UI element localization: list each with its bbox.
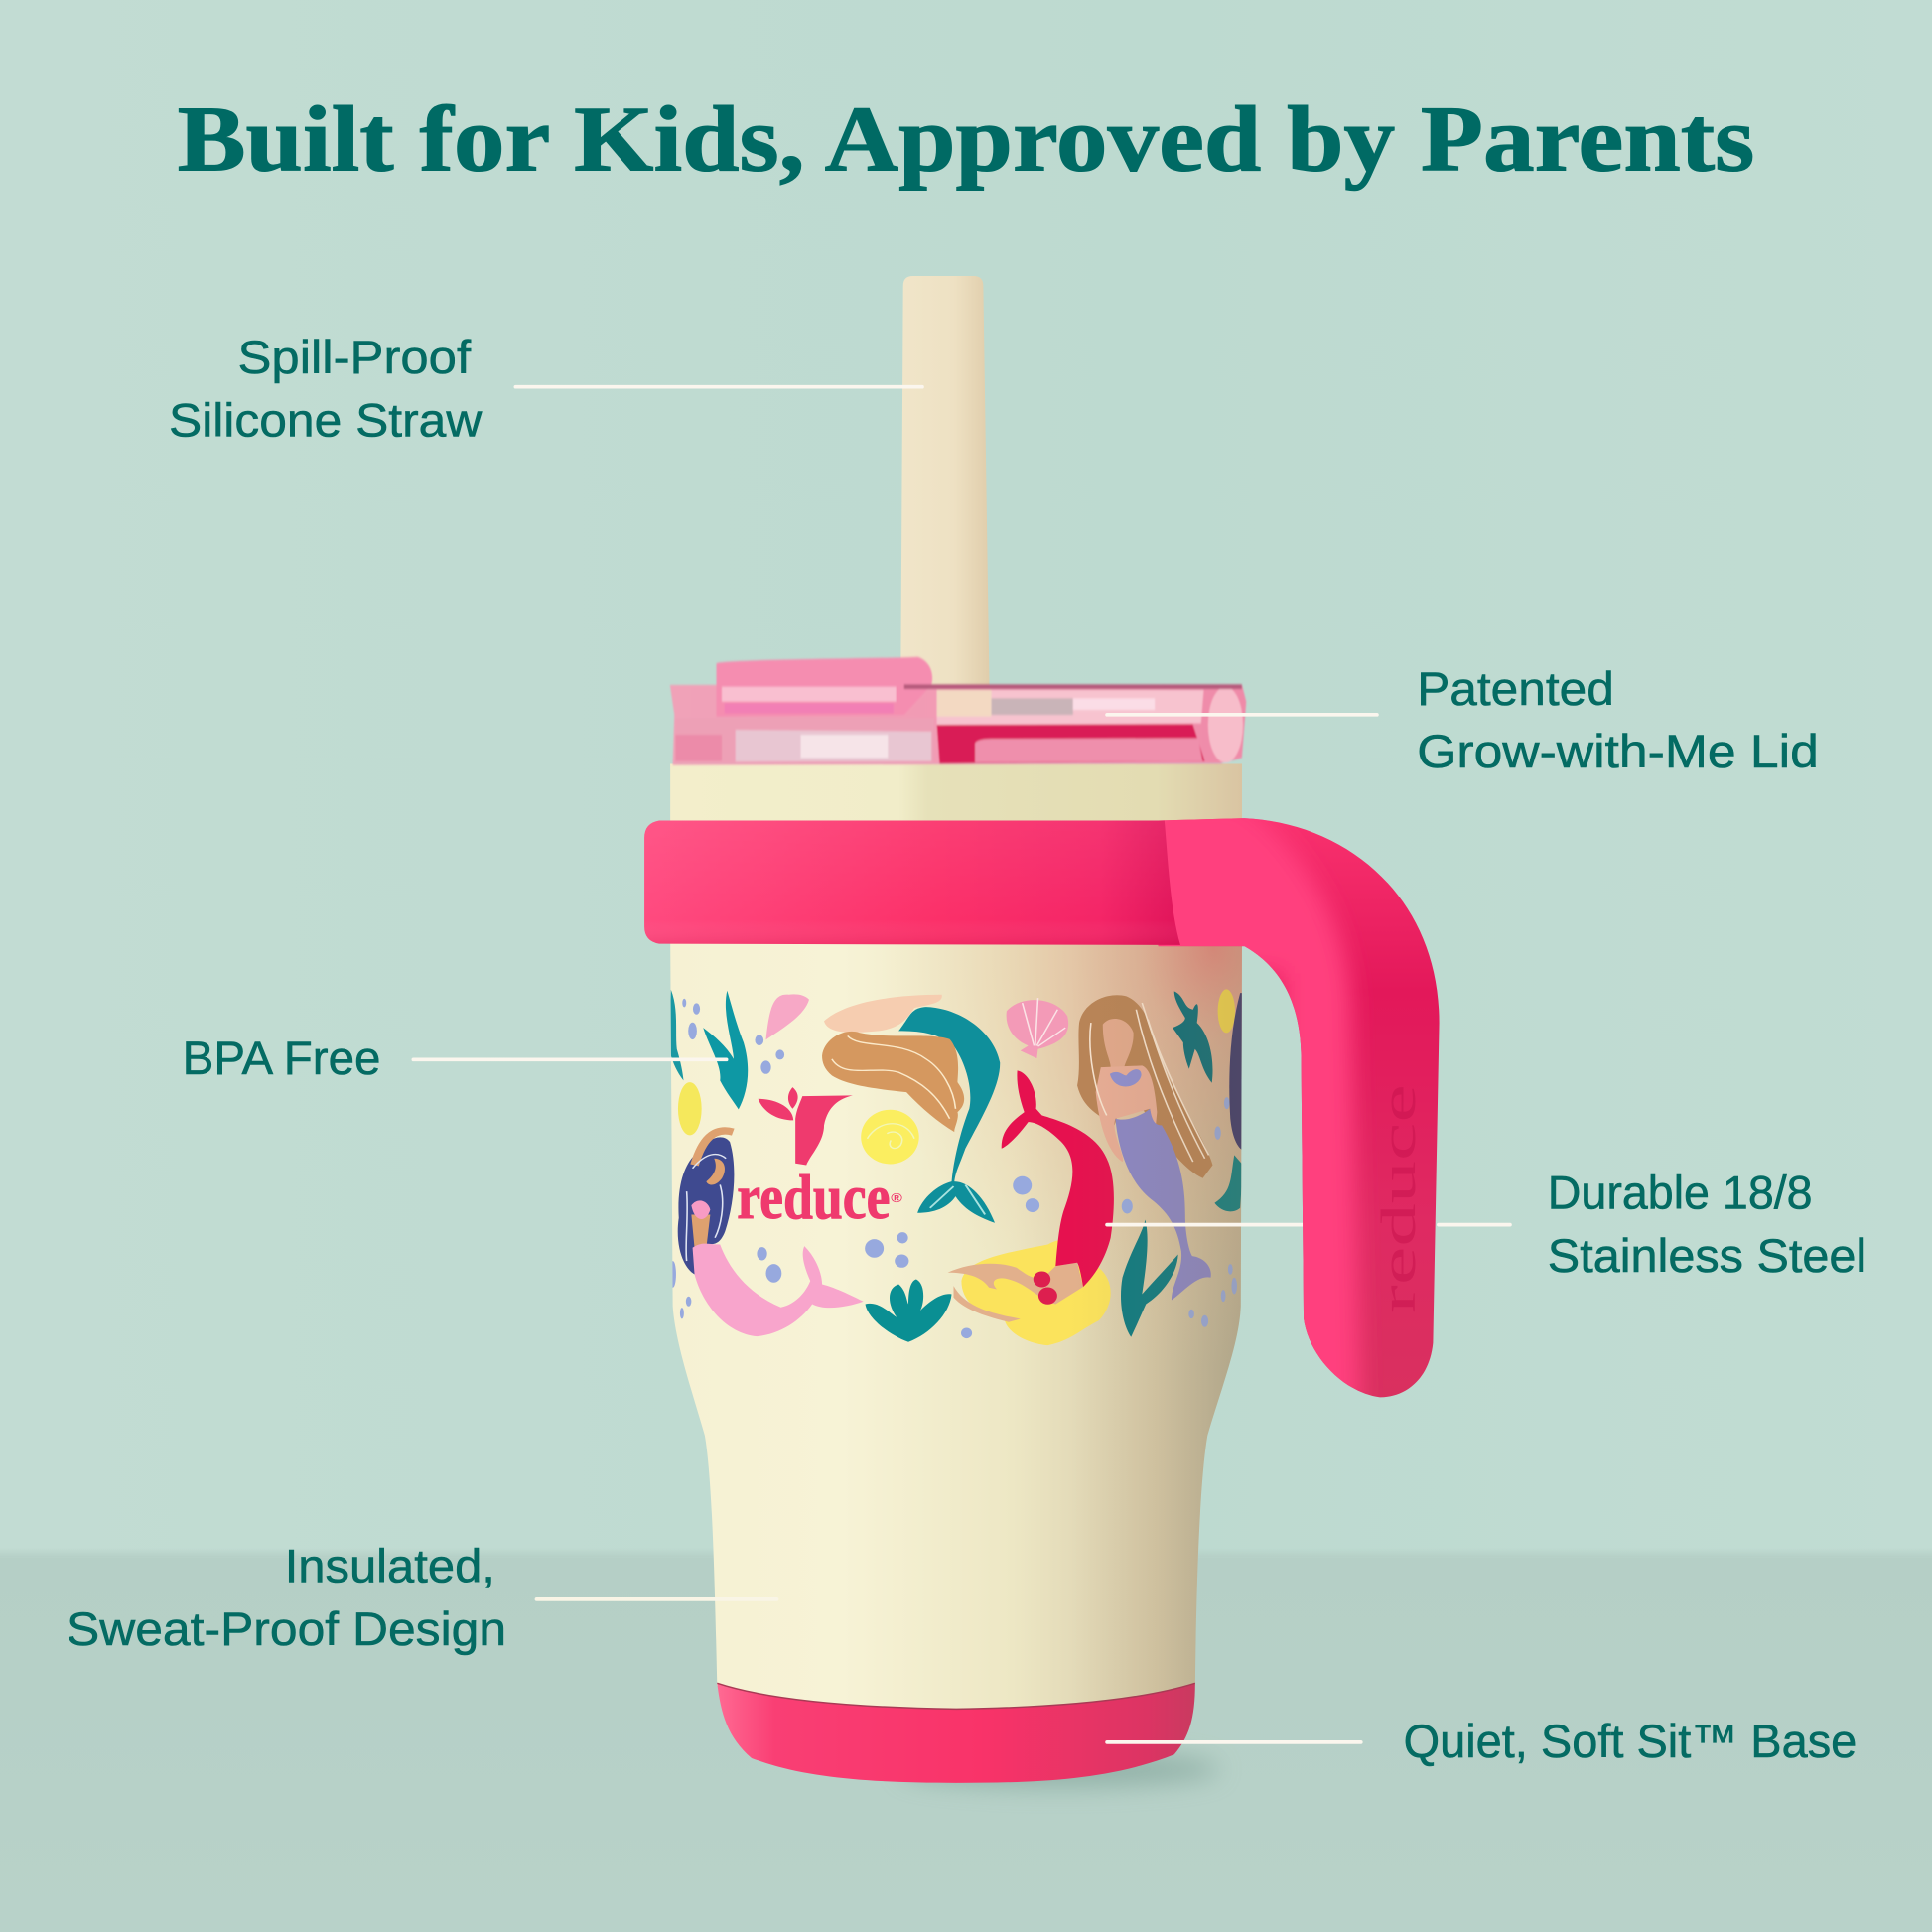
label: stainless steel	[1548, 1166, 1866, 1282]
tumbler collar	[670, 763, 1242, 826]
pink translucent lid	[670, 657, 1246, 765]
band shading	[644, 821, 1180, 945]
coral	[866, 1279, 952, 1342]
label: insulated: Sweat-Proof Design	[67, 1602, 506, 1655]
teal mermaid	[822, 995, 1000, 1223]
warm handle reflection on body	[950, 945, 1242, 1253]
soft sit silicone base	[717, 1683, 1195, 1783]
title: Built for Kids, Approved by Parents	[178, 87, 1754, 191]
reduce logo: ®	[891, 1191, 902, 1205]
mermaid pattern wrap	[665, 936, 1244, 1725]
reduce logo	[737, 1087, 902, 1232]
callout line: insulated	[535, 1597, 778, 1601]
label: insulated	[67, 1540, 506, 1655]
label: base: Quiet, Soft Sit™ Base	[1404, 1715, 1857, 1767]
left seaweeds	[669, 990, 748, 1109]
embossed reduce wordmark on handle: reduce	[1371, 1084, 1426, 1313]
label: straw	[169, 331, 483, 446]
brunette mermaid	[1077, 995, 1212, 1300]
label: lid: Patented	[1417, 662, 1614, 715]
cup shadow on floor	[899, 1752, 1220, 1787]
pink tail mermaid	[678, 1131, 864, 1336]
tumbler body	[670, 936, 1242, 1712]
handle front face	[1146, 801, 1360, 1405]
label: stainless steel: Durable 18/8	[1548, 1166, 1813, 1218]
callout line: BPA free	[412, 1057, 728, 1061]
label: insulated: Insulated,	[285, 1540, 495, 1592]
callout line: lid	[1105, 713, 1379, 717]
carrying band	[644, 821, 1180, 945]
label: lid: Grow-with-Me Lid	[1417, 725, 1819, 777]
label: straw: Spill-Proof	[238, 331, 472, 383]
dark seaweed and right edge	[1121, 991, 1244, 1337]
label: BPA free: BPA Free	[183, 1032, 380, 1084]
reduce logo: reduce	[737, 1163, 890, 1232]
callout line: base	[1105, 1740, 1363, 1744]
label: straw: Silicone Straw	[169, 393, 483, 446]
callout line: stainless steel, left segment	[1105, 1223, 1314, 1226]
label: stainless steel: Stainless Steel	[1548, 1229, 1866, 1282]
silicone straw	[900, 276, 990, 690]
label: lid	[1417, 662, 1819, 777]
handle side face	[1159, 818, 1440, 1397]
bubbles	[670, 999, 1237, 1338]
callout line: straw	[514, 385, 924, 389]
shells	[678, 989, 1235, 1164]
callout line: stainless steel, right segment	[1437, 1223, 1512, 1226]
red tail mermaid	[948, 1070, 1114, 1345]
